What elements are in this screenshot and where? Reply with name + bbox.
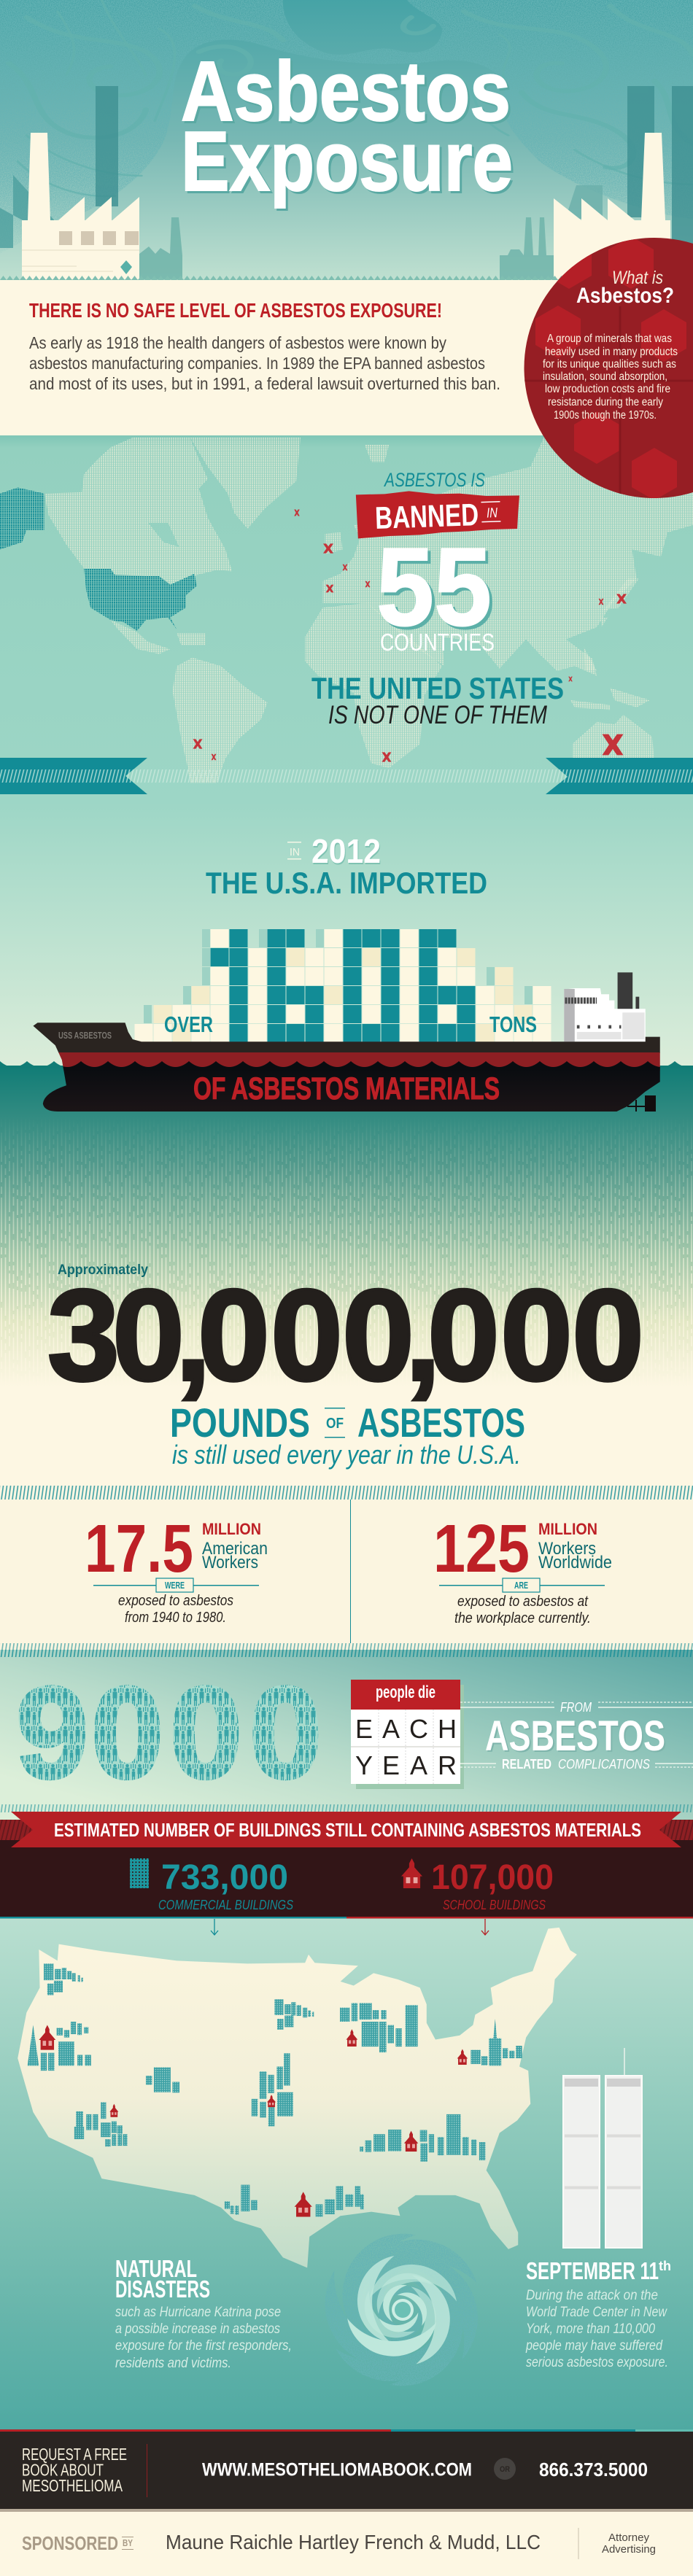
hurricane dark grainy arms (306, 2214, 492, 2405)
heading: in 2012: 2012 (311, 832, 381, 870)
callout text: 1900s though the 1970s. (554, 409, 657, 422)
red x marks on banning countries (193, 509, 627, 762)
intro paragraph: asbestos manufacturing companies. In 1989 the EPA banned asbestos (29, 354, 485, 373)
commercial buildings count (130, 1858, 293, 1912)
light swirl lines in smoke (9, 0, 693, 196)
city: dakota (274, 1999, 314, 2030)
calendar: people die each year: A (410, 1750, 427, 1780)
city: southeast (360, 2114, 485, 2162)
hero panel: teal sky with smoke and factories (0, 0, 693, 280)
ship rudder (627, 1095, 656, 1112)
text: september 11th: World Trade Center in New (526, 2305, 667, 2320)
stat: 125 million workers worldwide (433, 1510, 612, 1626)
heading: pounds of asbestos: POUNDS (170, 1400, 310, 1446)
city: california (28, 2022, 91, 2071)
city: chicago (340, 2003, 418, 2052)
intro heading: THERE IS NO SAFE LEVEL OF ASBESTOS EXPOSURE! (29, 299, 442, 322)
stat: 17.5 million american workers (85, 1510, 268, 1626)
red torn banner: banned in: IN (487, 505, 498, 521)
background factories and chimneys (0, 86, 693, 280)
city: central (252, 2053, 293, 2126)
sky background for map and ship sections (0, 435, 693, 1068)
text: september 11th: th (659, 2259, 671, 2273)
subheading: still used every year: is still used every year in the U.S.A. (172, 1440, 521, 1470)
text: natural disasters (115, 2255, 292, 2371)
city: southwest (74, 2102, 128, 2146)
city: new york (457, 2019, 522, 2065)
heading: pounds of asbestos: OF (326, 1416, 344, 1432)
red ribbon heading (11, 1812, 681, 1847)
intro panel (0, 280, 693, 435)
calendar: people die each year: C (409, 1714, 428, 1744)
text: natural disasters: NATURAL (115, 2255, 197, 2282)
or badge (494, 2458, 516, 2480)
arrow: commercial (211, 1919, 218, 1935)
text: september 11th: people may have suffered (525, 2338, 663, 2354)
attorney advertising note: Attorney (608, 2532, 649, 2544)
text: september 11th: York, more than 110,000 (526, 2321, 655, 2337)
title: Exposure (181, 114, 513, 209)
calendar: people die each year: A (382, 1714, 400, 1744)
phone: 866.373.5000 (539, 2459, 648, 2480)
callout heading: Asbestos? (576, 284, 674, 308)
stat: 125 million workers worldwide: MILLION (538, 1520, 597, 1538)
intro paragraph: As early as 1918 the health dangers of asbestos were known by (29, 333, 446, 352)
calendar: people die each year: E (382, 1750, 400, 1780)
text: natural disasters: DISASTERS (115, 2276, 210, 2303)
title: Asbestos (181, 44, 511, 139)
title (181, 44, 513, 209)
callout text (543, 333, 678, 422)
callout text: low production costs and fire (545, 383, 670, 395)
stat: 125 million workers worldwide: 125 (433, 1510, 530, 1586)
ship name: USS ASBESTOS (58, 1031, 112, 1041)
request text: MESOTHELIOMA (22, 2476, 123, 2495)
twin towers (563, 2048, 642, 2248)
big number 55: 55 (376, 525, 492, 649)
sponsored by: SPONSORED (22, 2532, 118, 2554)
intro paragraph (29, 333, 500, 393)
water and falling fibres (0, 1061, 693, 1370)
city: mountain (146, 2068, 179, 2092)
hurricane (306, 2214, 492, 2405)
intro paragraph: and most of its uses, but in 1991, a federal lawsuit overturned this ban. (29, 374, 500, 393)
text: september 11th: During the attack on the (526, 2288, 658, 2303)
sponsored by: BY (123, 2537, 133, 2548)
left factory (22, 133, 139, 279)
stat: 17.5 million american workers: 17.5 (85, 1510, 193, 1586)
text: from asbestos related complications: RELATED (502, 1757, 551, 1772)
number 9000 made of people: 9000 (16, 1660, 322, 1805)
USA highlighted on map (84, 569, 197, 631)
text: from asbestos related complications (460, 1700, 693, 1772)
text: from asbestos related complications: FROM (560, 1700, 592, 1715)
commercial buildings count: COMMERCIAL BUILDINGS (158, 1898, 293, 1912)
footer call to action (0, 2429, 693, 2512)
stat: 125 million workers worldwide: Worldwide (538, 1553, 612, 1572)
stat: 125 million workers worldwide: ARE (514, 1580, 528, 1591)
panel: annual deaths (0, 1643, 693, 1821)
stat: 125 million workers worldwide: exposed to asbestos at (457, 1594, 589, 1610)
request text (22, 2445, 127, 2495)
calendar: people die each year: people die (376, 1683, 435, 1702)
callout text: heavily used in many products (545, 346, 678, 358)
callout text: for its unique qualities such as (543, 358, 676, 371)
footer sponsor bar (0, 2512, 693, 2576)
calendar: people die each year: Y (355, 1750, 373, 1780)
calendar: people die each year (351, 1680, 464, 1789)
label: countries: COUNTRIES (380, 629, 495, 656)
stat: 17.5 million american workers: MILLION (202, 1520, 261, 1538)
callout text: resistance during the early (548, 396, 663, 408)
red callout: what is asbestos (524, 238, 693, 498)
label: tons: TONS (489, 1012, 537, 1037)
heading: pounds of asbestos (170, 1400, 525, 1446)
heading: in 2012: IN (290, 846, 300, 858)
heading: pounds of asbestos: ASBESTOS (357, 1400, 525, 1446)
stat: 17.5 million american workers: Workers (202, 1553, 258, 1572)
label: asbestos is: ASBESTOS IS (383, 469, 485, 491)
stat: 125 million workers worldwide: Workers (538, 1539, 596, 1559)
callout heading: What is (612, 268, 663, 288)
hull label: of asbestos materials: OF ASBESTOS MATERIALS (193, 1071, 500, 1106)
hurricane light arms (340, 2249, 464, 2370)
teal ribbons (0, 758, 693, 794)
label: approximately: Approximately (58, 1262, 148, 1278)
label: over: OVER (164, 1012, 213, 1037)
text: natural disasters: exposure for the first responders, (115, 2338, 292, 2354)
city: texas (225, 2185, 364, 2216)
callout text: insulation, sound absorption, (543, 371, 667, 383)
city: pacific northwest (44, 1963, 83, 1995)
subheading: is not one of them: IS NOT ONE OF THEM (328, 701, 548, 729)
panel: workers stats (0, 1500, 693, 1643)
calendar: people die each year: R (438, 1750, 457, 1780)
right factory (554, 133, 670, 279)
ship superstructure (564, 972, 646, 1041)
red torn banner: banned in: BANNED (374, 497, 479, 536)
text: natural disasters: a possible increase in asbestos (115, 2321, 280, 2337)
school buildings count (401, 1858, 554, 1912)
school buildings count: SCHOOL BUILDINGS (443, 1898, 546, 1912)
heading: the united states: THE UNITED STATES (311, 671, 564, 705)
attorney advertising note (602, 2532, 656, 2556)
Alaska highlighted on map (0, 487, 44, 549)
arrow: school (481, 1919, 489, 1935)
calendar: people die each year: H (438, 1714, 457, 1744)
red torn banner: banned in (356, 491, 519, 538)
callout text: A group of minerals that was (547, 333, 672, 345)
smoke mass (0, 0, 693, 254)
text: natural disasters: such as Hurricane Katrina pose (115, 2305, 281, 2320)
callout heading (576, 268, 674, 308)
stat: 17.5 million american workers: exposed to asbestos (118, 1593, 233, 1609)
panel: buildings dark band (0, 1812, 693, 1918)
request text: BOOK ABOUT (22, 2461, 104, 2480)
cargo containers forming 1606 (134, 929, 551, 1042)
firm name: Maune Raichle Hartley French & Mudd, LLC (166, 2531, 541, 2553)
big number 30,000,000: 30,000,000 (47, 1262, 644, 1408)
ship hull (34, 1023, 660, 1112)
text: september 11th: serious asbestos exposure. (526, 2355, 668, 2370)
stat: 17.5 million american workers: American (202, 1539, 268, 1559)
commercial buildings count: 733,000 (161, 1858, 288, 1897)
stat: 125 million workers worldwide: the workplace currently. (454, 1610, 591, 1626)
or badge: OR (500, 2465, 510, 2474)
panel: us map background (0, 1918, 693, 2430)
text: september 11th (525, 2257, 671, 2370)
stat: 17.5 million american workers: from 1940 to 1980. (125, 1610, 226, 1626)
attorney advertising note: Advertising (602, 2543, 656, 2556)
world map dotted (0, 438, 693, 783)
text: from asbestos related complications: COMPLICATIONS (558, 1757, 650, 1772)
calendar: people die each year: E (355, 1714, 373, 1744)
school buildings count: 107,000 (431, 1858, 554, 1897)
hatch band above stats (0, 1486, 693, 1500)
us map with buildings (18, 1928, 577, 2267)
request text: REQUEST A FREE (22, 2445, 127, 2464)
heading: the usa imported: THE U.S.A. IMPORTED (206, 866, 487, 900)
website: WWW.MESOTHELIOMABOOK.COM (202, 2459, 472, 2480)
stat: 17.5 million american workers: WERE (165, 1580, 185, 1591)
text: natural disasters: residents and victims. (115, 2356, 231, 2371)
